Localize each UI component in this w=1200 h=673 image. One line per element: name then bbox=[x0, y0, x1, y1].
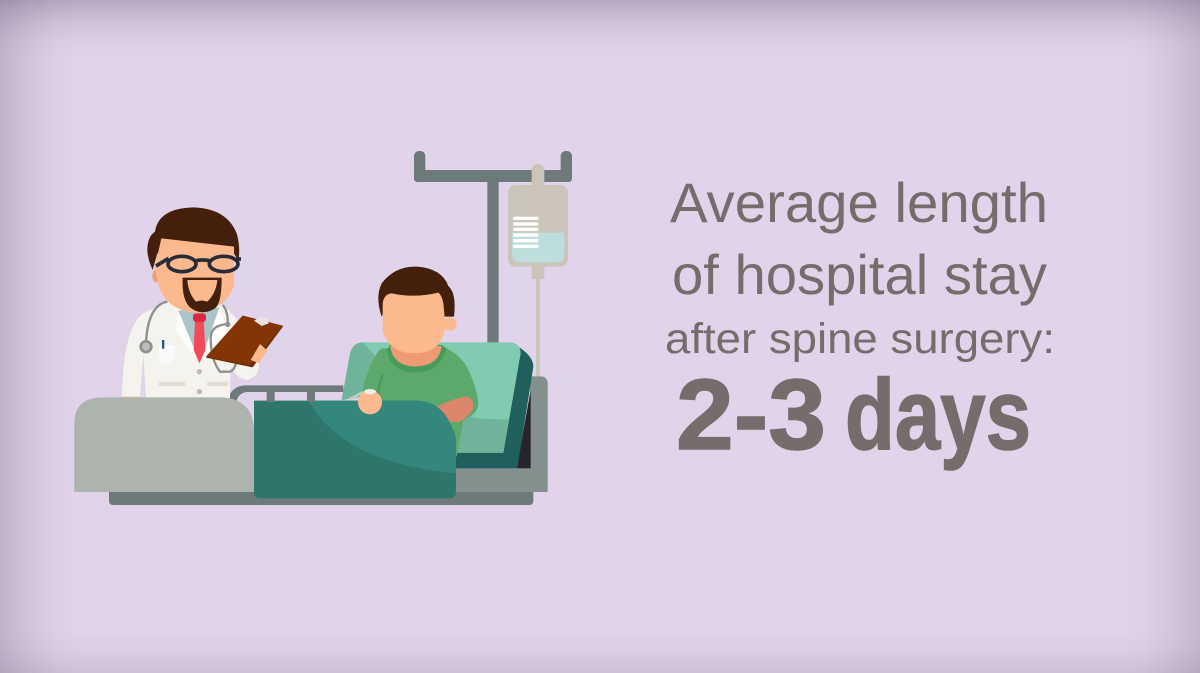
clipboard bbox=[206, 316, 283, 367]
blanket bbox=[254, 401, 456, 498]
illustration: doctor with clipboard at foot of bed bbox=[74, 207, 343, 492]
line 1: Average length bbox=[670, 171, 1048, 234]
lab coat bbox=[122, 302, 259, 398]
bed base bar bbox=[109, 492, 533, 505]
ear bbox=[152, 270, 160, 282]
hair bbox=[147, 207, 239, 270]
pillow bbox=[342, 342, 521, 453]
line 2: of hospital stay bbox=[672, 243, 1047, 306]
bed frame headboard bbox=[453, 376, 548, 492]
IV bag bbox=[508, 164, 568, 380]
line 4: value: days bbox=[845, 359, 1031, 471]
tie bbox=[193, 313, 206, 363]
text: headline bbox=[665, 171, 1055, 471]
glasses bbox=[156, 256, 241, 272]
side rail bbox=[228, 385, 343, 402]
IV pole bbox=[414, 151, 572, 347]
mattress back bbox=[453, 347, 533, 468]
face bbox=[383, 293, 445, 353]
forearm bbox=[437, 396, 473, 422]
hair bbox=[378, 267, 455, 317]
lapels bbox=[175, 308, 228, 362]
line 4: value: 2-3 bbox=[676, 359, 826, 471]
illustration: patient in hospital bed with IV bbox=[109, 151, 572, 505]
line 4: value bbox=[676, 359, 1031, 471]
shirt bbox=[360, 348, 478, 457]
line 3: after spine surgery: bbox=[665, 315, 1055, 363]
footboard bbox=[74, 397, 254, 492]
beard bbox=[183, 278, 222, 312]
pocket and pen bbox=[158, 340, 228, 394]
face bbox=[155, 238, 234, 313]
stethoscope bbox=[141, 302, 237, 372]
gap shadow behind mattress bbox=[517, 390, 531, 468]
shirt collar bbox=[178, 307, 219, 363]
patient hand with IV line bbox=[349, 389, 382, 414]
ear bbox=[443, 317, 457, 331]
hand on footboard bbox=[122, 394, 140, 399]
patient bbox=[360, 267, 478, 457]
